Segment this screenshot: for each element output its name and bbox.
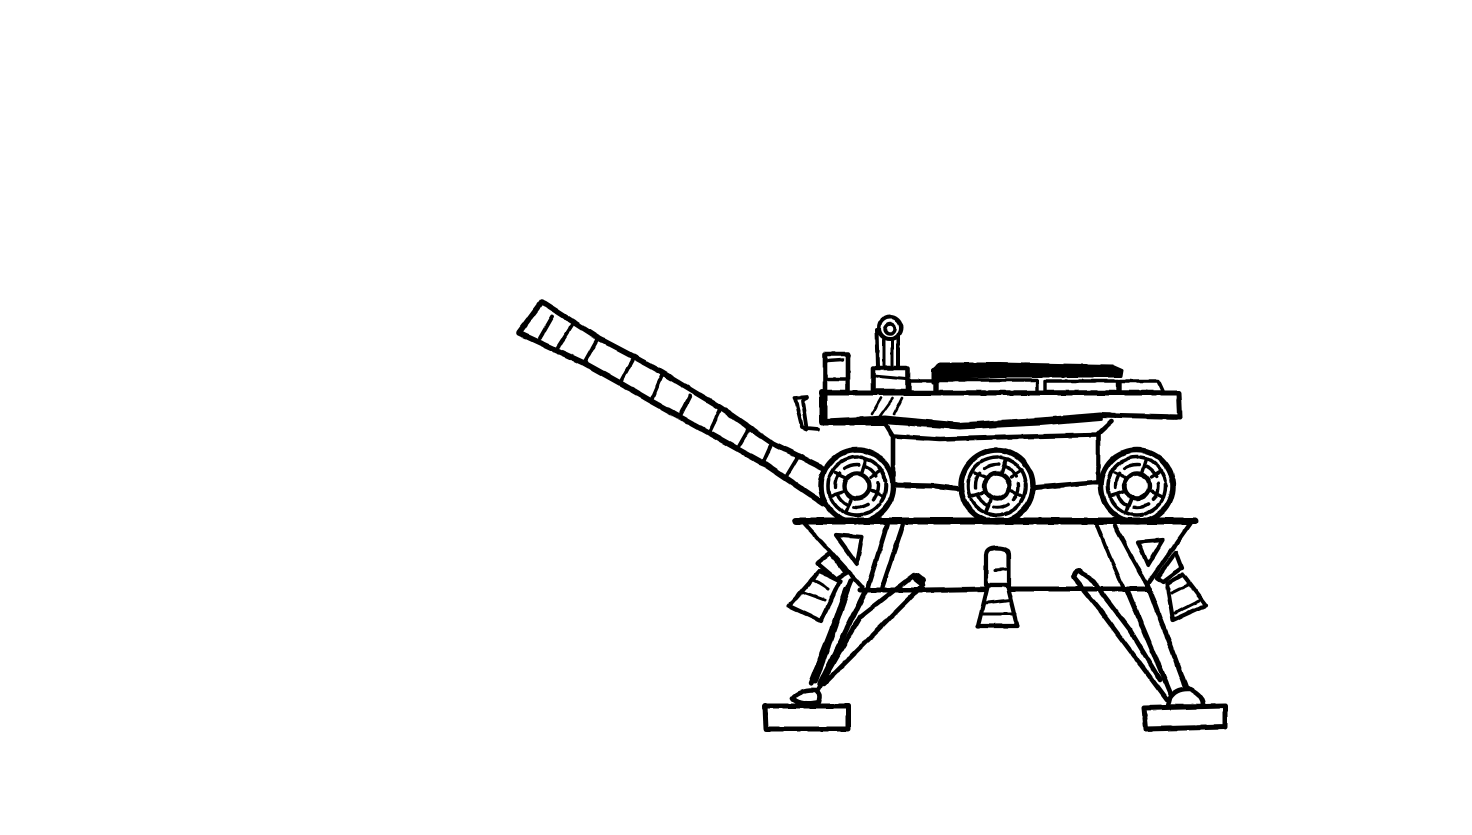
robotic hook on rover front	[795, 397, 818, 429]
center thruster nozzle	[978, 548, 1017, 626]
rover deck: top platform	[822, 392, 1180, 426]
camera mast on rover	[873, 317, 908, 391]
ramp: ladder boom leaning from the rover to the upper left	[519, 302, 824, 504]
rover body: chassis between the wheels	[885, 421, 1112, 489]
left landing leg	[811, 575, 923, 690]
right landing foot and pad	[1144, 689, 1225, 729]
instrument box on rover	[825, 354, 848, 392]
left thruster nozzle	[789, 553, 846, 621]
lander struts under the platform	[867, 525, 1147, 590]
solar panel on rover deck	[910, 364, 1163, 392]
lander platform	[796, 521, 1195, 590]
lander triangle marks	[836, 535, 1163, 565]
left landing foot and pad	[765, 690, 848, 729]
rover wheels	[821, 450, 1173, 522]
right thruster nozzle	[1157, 552, 1206, 620]
right landing leg	[1073, 571, 1187, 700]
